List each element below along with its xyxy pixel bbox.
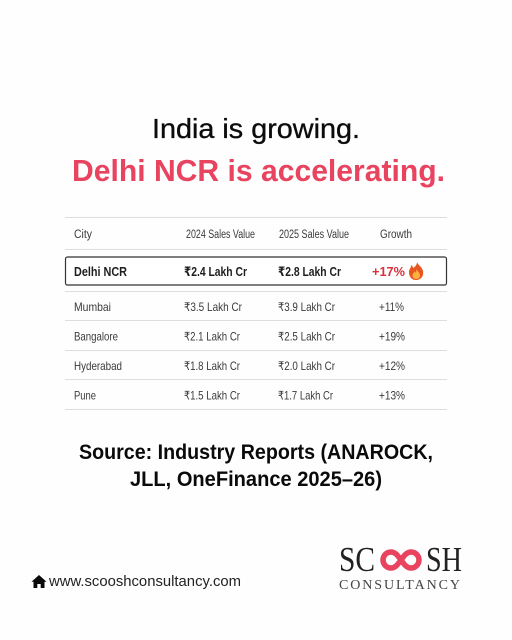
logo [339, 540, 462, 593]
row: Bangalore: Bangalore [74, 330, 118, 344]
row: Hyderabad: Hyderabad [74, 359, 122, 373]
title [72, 113, 445, 188]
row: Mumbai: ₹3.5 Lakh Cr [184, 300, 242, 314]
row: Bangalore: ₹2.1 Lakh Cr [184, 330, 240, 344]
table header row: City [74, 229, 92, 241]
title: India is growing. [152, 113, 360, 144]
table header row [74, 229, 412, 241]
highlighted row: Delhi NCR: ₹2.4 Lakh Cr [184, 264, 247, 279]
source note: JLL, OneFinance 2025–26) [130, 467, 382, 491]
highlighted row: Delhi NCR: +17% [372, 264, 405, 279]
table [65, 218, 447, 410]
row: Hyderabad: +12% [379, 359, 405, 373]
row: Bangalore [74, 330, 405, 344]
table header row: 2025 Sales Value [279, 229, 349, 241]
logo: CONSULTANCY [339, 578, 460, 593]
logo: SC [339, 540, 375, 579]
row: Pune: ₹1.7 Lakh Cr [278, 388, 333, 402]
row: Bangalore: ₹2.5 Lakh Cr [278, 330, 335, 344]
title: Delhi NCR is accelerating. [72, 153, 445, 188]
highlighted row: Delhi NCR [66, 257, 446, 285]
logo: SH [426, 540, 462, 579]
row: Hyderabad [74, 359, 405, 373]
icon: fire [409, 262, 423, 280]
row: Pune: ₹1.5 Lakh Cr [184, 388, 240, 402]
highlighted row: Delhi NCR: ₹2.8 Lakh Cr [278, 264, 341, 279]
icon: home [32, 575, 46, 588]
table header row: Growth [380, 229, 412, 241]
row: Mumbai: +11% [379, 300, 404, 314]
row: Bangalore: +19% [379, 330, 405, 344]
icon: infinity loop [383, 552, 419, 568]
row: Hyderabad: ₹1.8 Lakh Cr [184, 359, 240, 373]
row: Mumbai [74, 300, 404, 314]
row: Mumbai: Mumbai [74, 300, 111, 314]
source note [79, 440, 433, 491]
row: Hyderabad: ₹2.0 Lakh Cr [278, 359, 335, 373]
website link: www.scooshconsultancy.com [48, 574, 241, 590]
table header row: 2024 Sales Value [186, 229, 255, 241]
row: Pune: Pune [74, 388, 96, 402]
highlighted row: Delhi NCR: Delhi NCR [74, 264, 128, 279]
row: Mumbai: ₹3.9 Lakh Cr [278, 300, 335, 314]
source note: Source: Industry Reports (ANAROCK, [79, 440, 433, 464]
row: Pune [74, 388, 405, 402]
row: Pune: +13% [379, 388, 405, 402]
